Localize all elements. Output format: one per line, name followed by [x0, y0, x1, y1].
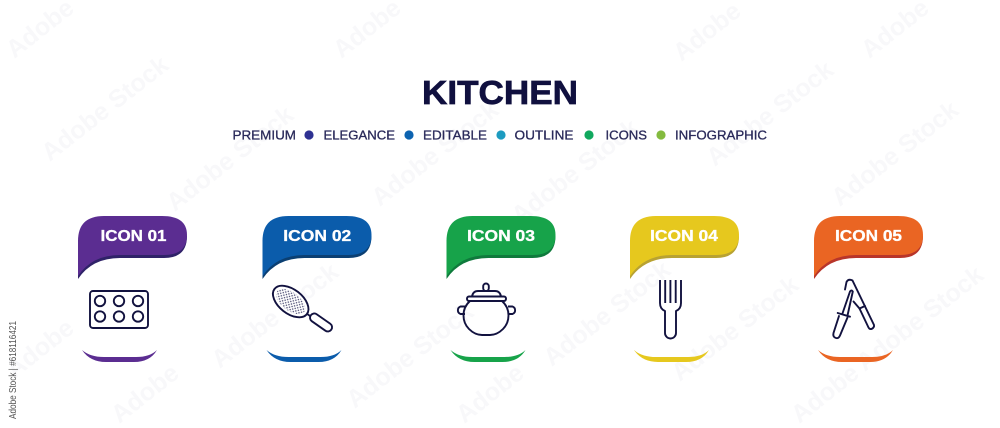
- icon: fork: [660, 280, 681, 338]
- panel: icon 02: ICON 02: [283, 228, 351, 245]
- subtitle keyword row: ELEGANCE: [324, 129, 395, 143]
- text: Adobe: [451, 359, 529, 428]
- subtitle keyword row: OUTLINE: [514, 129, 574, 143]
- panel: icon 01: [78, 216, 187, 362]
- text: Adobe Stock: [36, 51, 174, 167]
- title: KITCHEN: [422, 74, 578, 111]
- text: Adobe Stock: [701, 56, 839, 172]
- text: Adobe Stock: [666, 271, 804, 387]
- subtitle keyword row: EDITABLE: [423, 129, 487, 143]
- panel: icon 03: ICON 03: [467, 228, 535, 245]
- subtitle keyword row: ICONS: [606, 129, 647, 143]
- panel: icon 05: ICON 05: [835, 228, 902, 245]
- text: Adobe Stock: [161, 101, 299, 217]
- panel: icon 02: [262, 216, 372, 362]
- icon: strainer: [267, 279, 334, 333]
- icon: knife and sharpener: [833, 280, 874, 338]
- text: Adobe: [786, 359, 864, 428]
- subtitle keyword row: [232, 129, 767, 143]
- panel: icon 04: [630, 216, 739, 362]
- panel: icon 01: ICON 01: [100, 228, 167, 245]
- text: Adobe Stock: [851, 261, 989, 377]
- text: Adobe Stock: [538, 256, 676, 372]
- icon: cooking pot: [458, 284, 515, 335]
- panel: icon 04: ICON 04: [650, 228, 718, 245]
- text: Adobe: [1, 314, 79, 384]
- text: Adobe Stock: [341, 298, 479, 414]
- text: Adobe Stock: [366, 96, 504, 212]
- panel: icon 03: [446, 216, 556, 362]
- text: Adobe Stock: [826, 96, 964, 212]
- subtitle keyword row: INFOGRAPHIC: [675, 129, 767, 143]
- text: Adobe Stock: [506, 114, 644, 230]
- icon: muffin tray: [90, 291, 148, 328]
- stock image id: Adobe Stock | #618116421: [7, 321, 19, 419]
- subtitle keyword row: PREMIUM: [232, 129, 296, 143]
- panel: icon 05: [814, 216, 923, 362]
- text: Adobe Stock: [206, 258, 344, 374]
- text: Adobe: [106, 359, 184, 428]
